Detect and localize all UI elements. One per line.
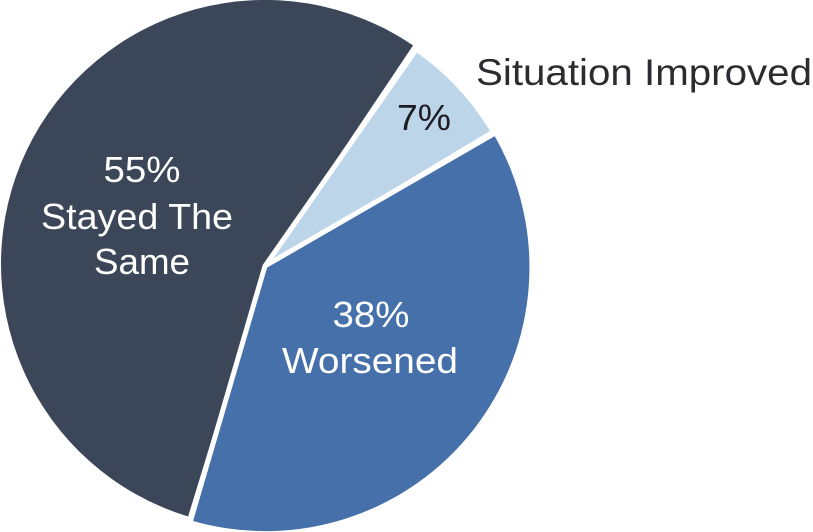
label: 55% stayed the same xyxy=(41,149,233,282)
label: 55% stayed the same: Stayed The xyxy=(41,196,233,237)
slice dividers xyxy=(189,47,497,526)
slice: worsened 38% xyxy=(193,135,529,531)
label: 38% worsened: 38% xyxy=(332,294,410,335)
label: 55% stayed the same: Same xyxy=(94,241,190,282)
label: 38% worsened xyxy=(282,294,458,381)
label: 55% stayed the same: 55% xyxy=(104,149,180,190)
slice: stayed the same 55% xyxy=(1,0,413,516)
label: 38% worsened: Worsened xyxy=(282,340,458,381)
label: 7%: 7% xyxy=(397,97,451,138)
slice: situation improved 7% xyxy=(265,52,490,266)
label: situation improved: Situation Improved xyxy=(476,52,812,93)
